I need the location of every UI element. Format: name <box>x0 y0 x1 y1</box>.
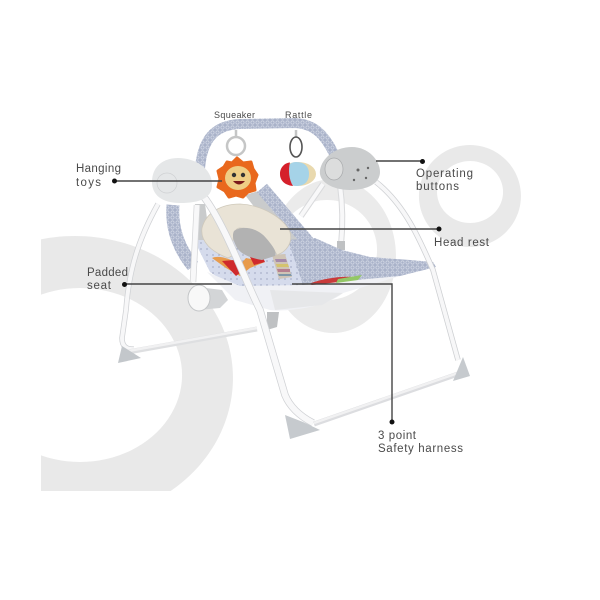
back left foot <box>118 346 141 363</box>
callout: operating buttons <box>376 159 473 193</box>
callout: padded seat: Padded <box>87 267 128 279</box>
rattle hanger <box>290 130 302 157</box>
squeaker hanger <box>227 130 245 155</box>
seat rainbow stripe <box>309 277 352 285</box>
rattle ball <box>280 162 316 186</box>
background shape: centre ring <box>270 179 396 333</box>
label: squeaker: Squeaker <box>214 110 255 120</box>
head rest <box>202 204 291 258</box>
callout: safety harness <box>292 284 463 455</box>
callout: padded seat: seat <box>87 280 112 292</box>
callout: operating buttons: buttons <box>416 181 459 193</box>
seat left band <box>173 205 193 266</box>
back crossbar <box>128 329 257 352</box>
left side pod <box>152 158 212 203</box>
seat right band <box>262 188 308 242</box>
canopy arch <box>200 123 333 168</box>
right inner tubes <box>301 184 342 245</box>
callout: hanging toys <box>76 163 222 189</box>
back left leg <box>122 204 158 349</box>
callout: head rest: Head rest <box>434 237 490 249</box>
callout: safety harness: 3 point <box>378 430 417 442</box>
seat toys print <box>212 257 265 276</box>
background shape: right ring <box>419 145 521 247</box>
right control pod <box>320 147 380 190</box>
inner support bracket <box>267 312 279 330</box>
callout: hanging toys: toys <box>76 177 101 189</box>
label: rattle: Rattle <box>285 110 312 120</box>
baby swing product <box>118 123 470 439</box>
callout: hanging toys: Hanging <box>76 163 121 175</box>
left inner tube <box>193 205 197 282</box>
motor housing <box>198 287 228 310</box>
seat lower white band <box>207 272 400 310</box>
seat pale dotted panel <box>194 240 306 292</box>
back right foot <box>453 357 470 381</box>
front left tube <box>204 197 313 423</box>
seat blue fabric <box>288 238 436 285</box>
callout: head rest <box>280 226 490 249</box>
callout: operating buttons: Operating <box>416 168 473 180</box>
front crossbar <box>314 374 458 424</box>
xylophone print <box>272 254 292 279</box>
motor wheel <box>188 285 210 311</box>
callout: padded seat <box>87 267 232 292</box>
background shape: large left ring <box>41 236 233 491</box>
squeaker sunflower toy <box>218 158 257 197</box>
right main tube <box>376 182 458 360</box>
front right foot <box>285 415 320 439</box>
seat grey liner <box>192 190 305 248</box>
callout: safety harness: Safety harness <box>378 443 463 455</box>
